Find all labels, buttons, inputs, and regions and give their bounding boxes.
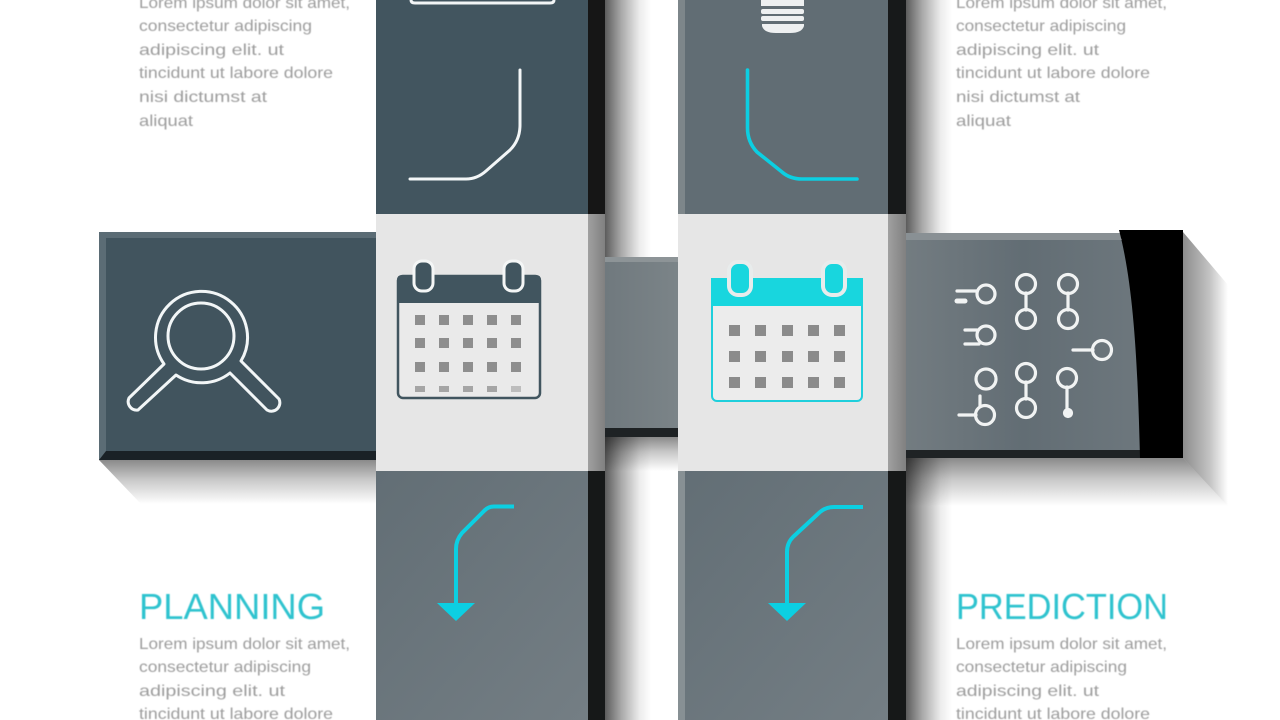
- black end cap: [1119, 230, 1183, 458]
- column center face: [376, 214, 588, 471]
- text block: bottom left: consectetur adipiscing: [139, 659, 311, 676]
- panel: center bridge: [605, 257, 678, 437]
- inner lens: [168, 303, 234, 369]
- icon: circuit nodes: [957, 274, 1112, 424]
- text block: top left: nisi dictumst at: [139, 89, 268, 106]
- text block: top left: consectetur adipiscing: [139, 18, 312, 35]
- text block: top left: adipiscing elit. ut: [139, 42, 285, 59]
- calendar header: [397, 275, 541, 303]
- column top face: [678, 0, 888, 214]
- arrow: cyan curve: [748, 70, 857, 179]
- column center face: [678, 214, 888, 471]
- arrow: white curve: [410, 70, 520, 179]
- column top face: [376, 0, 588, 214]
- column highlight top: [678, 0, 685, 214]
- column center edge: [588, 214, 605, 471]
- column bottom face: [678, 471, 888, 720]
- block face: [906, 240, 1140, 451]
- column top edge: [588, 0, 605, 214]
- text block: bottom left: [139, 636, 350, 720]
- column bottom face: [376, 471, 588, 720]
- text block: bottom right: [956, 636, 1167, 720]
- text block: top right: [956, 0, 1167, 130]
- block rim: [99, 232, 376, 460]
- block bottom edge: [906, 450, 1140, 458]
- column center edge: [888, 214, 906, 471]
- text block: top right: aliquat: [956, 113, 1012, 130]
- text block: bottom left: adipiscing elit. ut: [139, 683, 286, 700]
- panel: right block: [906, 230, 1183, 458]
- calendar header: [711, 278, 863, 306]
- calendar body: [712, 279, 862, 401]
- icon: dark calendar: [397, 261, 541, 398]
- block top rim: [906, 233, 1121, 241]
- icon: light bulb base: [761, 0, 804, 33]
- bridge bottom edge: [605, 428, 678, 437]
- text block: top right: tincidunt ut labore dolore: [956, 65, 1150, 82]
- text block: bottom right: adipiscing elit. ut: [956, 683, 1100, 700]
- text block: top left: tincidunt ut labore dolore: [139, 65, 333, 82]
- text block: top right: nisi dictumst at: [956, 89, 1081, 106]
- heading: prediction: PREDICTION: [956, 586, 1168, 627]
- left column: [376, 0, 605, 720]
- text block: top right: consectetur adipiscing: [956, 18, 1126, 35]
- text block: bottom left: Lorem ipsum dolor sit amet,: [139, 636, 350, 653]
- column bottom edge: [588, 471, 605, 720]
- panel: left block: [99, 232, 376, 460]
- block face: [106, 238, 376, 452]
- text block: top left: aliquat: [139, 113, 194, 130]
- icon: magnifying glass: [128, 291, 280, 411]
- calendar body: [398, 276, 540, 398]
- text block: top left: [139, 0, 350, 130]
- text block: bottom right: Lorem ipsum dolor sit amet,: [956, 636, 1167, 653]
- right column: [678, 0, 906, 720]
- bridge face: [605, 262, 678, 428]
- calendar rings: [414, 261, 523, 291]
- lens and handles outline: [128, 291, 280, 411]
- icon: partial monitor outline: [411, 0, 554, 3]
- calendar day grid: [415, 315, 521, 392]
- column highlight bottom: [678, 471, 685, 720]
- column top edge: [888, 0, 906, 214]
- text block: bottom right: consectetur adipiscing: [956, 659, 1127, 676]
- bridge top rim: [605, 257, 678, 263]
- arrow: left cyan down arrow: [437, 506, 514, 621]
- heading: planning: PLANNING: [139, 586, 325, 627]
- column bottom edge: [888, 471, 906, 720]
- icon: cyan calendar: [711, 262, 863, 401]
- calendar day grid: [729, 325, 845, 388]
- block bottom edge: [99, 451, 376, 460]
- calendar rings: [729, 262, 845, 295]
- text block: top right: adipiscing elit. ut: [956, 42, 1100, 59]
- arrow: right cyan down arrow: [768, 507, 863, 621]
